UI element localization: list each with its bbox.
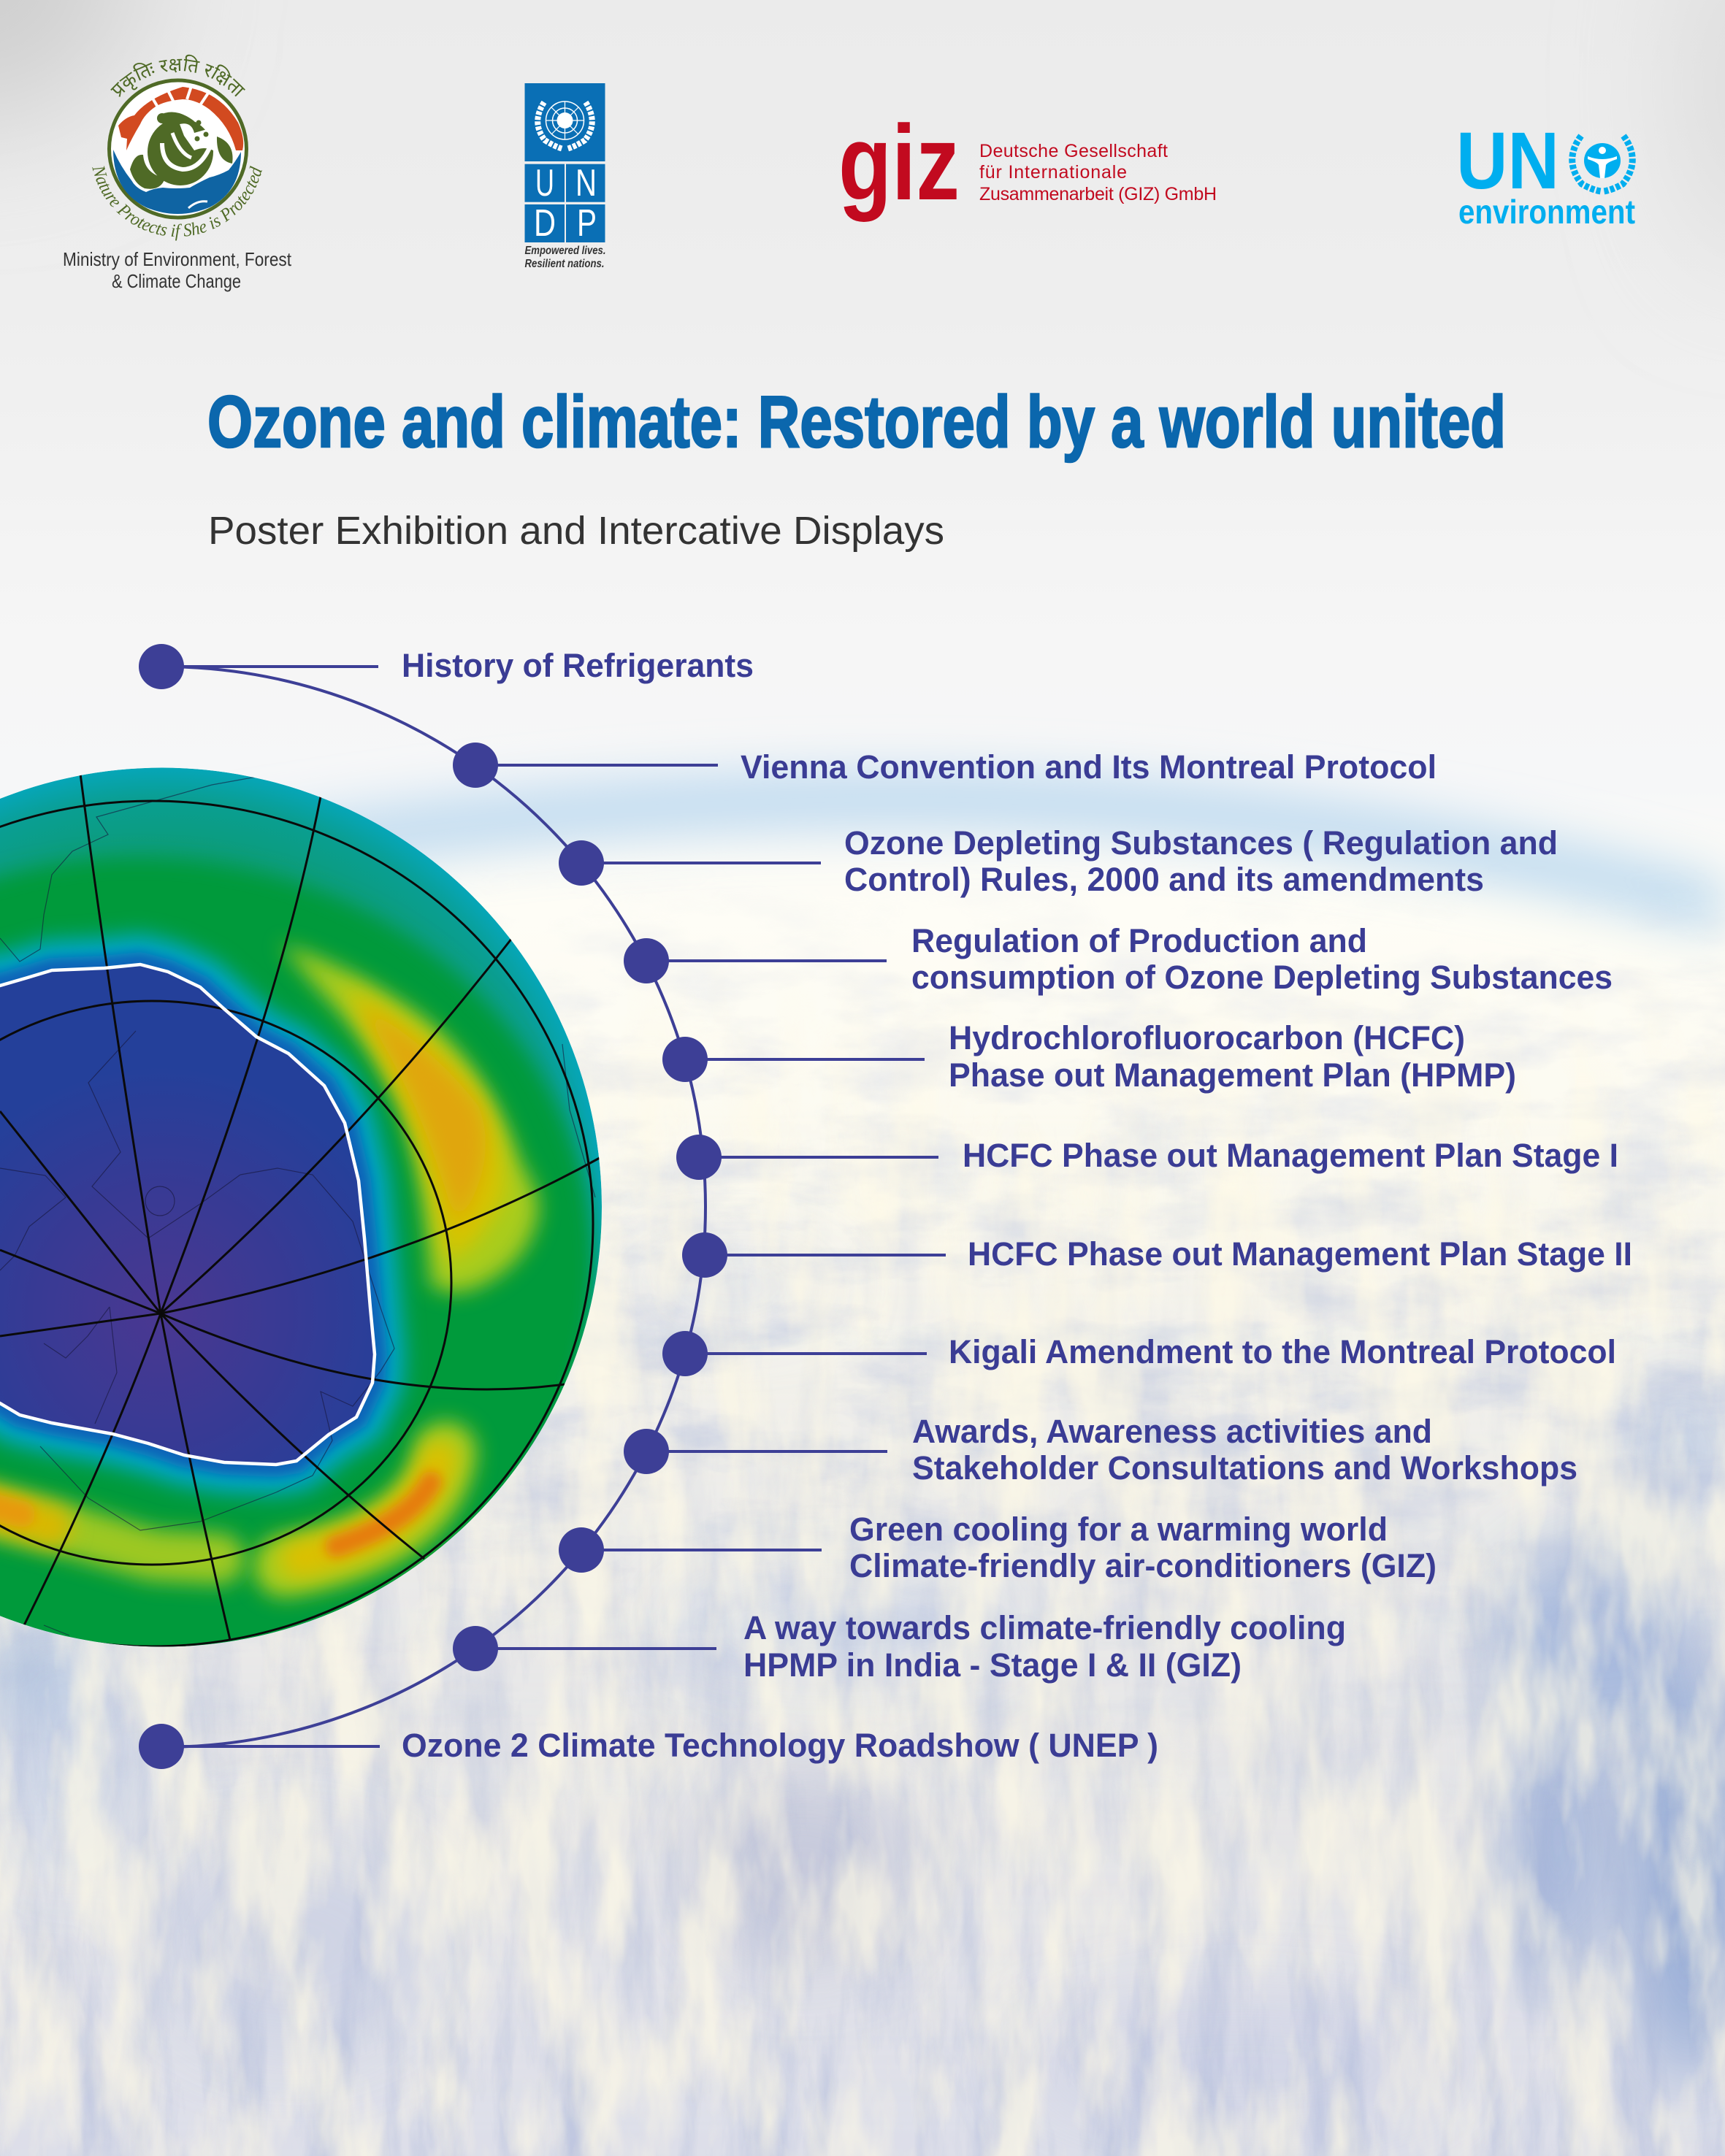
- timeline item: Awards and Awareness: [624, 1413, 1577, 1486]
- timeline item: ODS Rules: Control) Rules, 2000 and its amendments: [844, 861, 1484, 898]
- giz wordmark: giz: [838, 103, 960, 222]
- emblem motto Hindi: प्रकृतिः रक्षति रक्षिता: [110, 54, 245, 97]
- ozone hole interior: [0, 964, 375, 1465]
- giz organisation name: Zusammenarbeit (GIZ) GmbH: [979, 184, 1217, 204]
- cloud texture: [0, 945, 1725, 2156]
- timeline item: Awards and Awareness: Stakeholder Consultations and Workshops: [912, 1449, 1577, 1486]
- timeline item: Green cooling: [559, 1511, 1437, 1584]
- UNDP tagline: Resilient nations.: [524, 258, 605, 270]
- timeline item: Green cooling: Green cooling for a warming world: [849, 1511, 1388, 1548]
- UNDP letters: N: [575, 162, 597, 204]
- logo: Ministry of Environment, Forest & Climate Change: [63, 54, 292, 292]
- timeline item: HPMP Stage I: [676, 1135, 1618, 1180]
- timeline item: HPMP: [662, 1019, 1516, 1094]
- timeline item: HPMP: Phase out Management Plan (HPMP): [949, 1056, 1516, 1094]
- timeline item: Climate-friendly cooling: A way towards climate-friendly cooling: [743, 1609, 1346, 1646]
- logo: GIZ: [838, 103, 1217, 222]
- cloud shadows: [0, 1256, 1725, 2132]
- timeline arc: [161, 667, 705, 1747]
- timeline item: History of Refrigerants: [139, 644, 754, 689]
- UNDP letters: P: [577, 202, 597, 245]
- ozone hole halo: [0, 964, 375, 1465]
- dolphin and water: [113, 150, 241, 214]
- ozone hole white contour: [0, 964, 375, 1465]
- timeline item: ODS Rules: [559, 824, 1558, 898]
- timeline item: Regulation of Production: [624, 922, 1613, 996]
- yellow ozone high, lower right: [285, 1453, 445, 1566]
- timeline item: Climate-friendly cooling: HPMP in India - Stage I & II (GIZ): [743, 1646, 1242, 1684]
- emblem roundel: [110, 80, 247, 218]
- timeline item: Ozone 2 Climate Roadshow: Ozone 2 Climate Technology Roadshow ( UNEP ): [402, 1727, 1158, 1764]
- timeline item: Vienna Convention: Vienna Convention and Its Montreal Protocol: [741, 748, 1437, 786]
- UNEP emblem: [1572, 136, 1632, 191]
- tiger: [118, 87, 243, 150]
- ministry name: & Climate Change: [112, 270, 241, 292]
- ministry name: Ministry of Environment, Forest: [63, 248, 292, 270]
- timeline item: HPMP: Hydrochlorofluorocarbon (HCFC): [949, 1019, 1465, 1056]
- timeline item: Ozone 2 Climate Roadshow: [139, 1724, 1158, 1769]
- timeline item: Kigali Amendment: [662, 1331, 1616, 1376]
- UNDP letters: D: [534, 202, 556, 245]
- latitude and longitude grid: [0, 774, 600, 1646]
- timeline item: ODS Rules: Ozone Depleting Substances ( Regulation and: [844, 824, 1558, 862]
- timeline item: Kigali Amendment: Kigali Amendment to the Montreal Protocol: [949, 1333, 1616, 1370]
- giz organisation name: Deutsche Gesellschaft: [979, 141, 1168, 161]
- timeline item: Awards and Awareness: Awards, Awareness activities and: [912, 1413, 1432, 1450]
- timeline item: HPMP Stage I: HCFC Phase out Management Plan Stage I: [963, 1137, 1618, 1174]
- teal rim: [0, 768, 602, 1647]
- UNDP tagline: Empowered lives.: [524, 245, 606, 257]
- logo: UN Environment: [1456, 116, 1635, 231]
- coastlines: [0, 777, 595, 1635]
- timeline item: Regulation of Production: Regulation of Production and: [911, 922, 1367, 959]
- timeline item: HPMP Stage II: HCFC Phase out Management Plan Stage II: [968, 1235, 1632, 1273]
- globe: ozone hole map: [0, 768, 602, 1683]
- timeline item: History of Refrigerants: History of Refrigerants: [402, 647, 754, 684]
- yellow ozone high, upper right: [280, 944, 538, 1292]
- figure: [130, 112, 233, 189]
- UNDP letters: [534, 162, 597, 245]
- environment word: environment: [1458, 193, 1635, 231]
- subtitle: Poster Exhibition and Intercative Displays: [208, 509, 944, 553]
- timeline item: HPMP Stage II: [682, 1232, 1632, 1278]
- UNDP letters: U: [535, 162, 554, 204]
- timeline item: Green cooling: Climate-friendly air-conditioners (GIZ): [849, 1547, 1437, 1584]
- emblem motto English: Nature Protects if She is Protected: [92, 166, 262, 241]
- UN emblem: [538, 101, 592, 149]
- timeline item: Regulation of Production: consumption of Ozone Depleting Substances: [911, 959, 1613, 996]
- yellow ozone high, lower left: [0, 1503, 219, 1559]
- UN letters: UN: [1456, 116, 1559, 206]
- horizon glow: [0, 799, 1725, 909]
- corner shading: [0, 0, 1725, 263]
- timeline item: Climate-friendly cooling: [453, 1609, 1346, 1684]
- green ozone band: [0, 858, 595, 1683]
- logo: UNDP: [524, 83, 606, 270]
- timeline item: Vienna Convention: [453, 743, 1437, 788]
- giz organisation name: für Internationale: [979, 162, 1127, 183]
